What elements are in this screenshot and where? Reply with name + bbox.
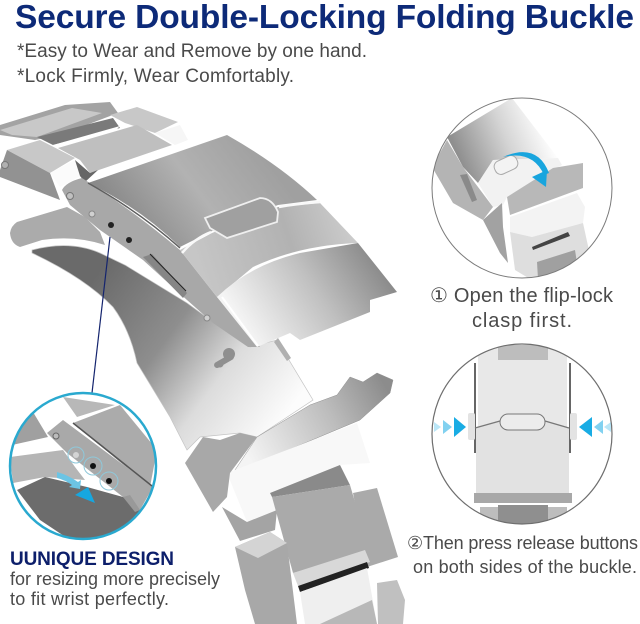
lower clasp left bracket [185,433,257,512]
lower band links [222,465,405,624]
top cover plate [88,135,317,247]
upper band links [0,102,188,200]
ridged flip-lock tab [205,198,278,238]
icon: press arrows [434,417,611,437]
seam highlights [88,183,320,346]
detail inset circle [10,393,157,540]
icon: resize arrow [57,472,81,489]
rail holes [66,192,210,321]
step 1 caption: ① Open the flip-lock [430,285,614,307]
side rail [62,178,260,347]
feature bullet text [17,41,367,87]
step 2 caption: on both sides of the buckle. [413,557,637,577]
lower clasp arm [10,207,105,247]
title: Secure Double-Locking Folding Buckle [15,0,634,36]
step 2 circle [432,344,612,525]
unique design description: to fit wrist perfectly. [10,589,169,609]
step 1 caption [430,285,614,332]
unique design description: for resizing more precisely [10,569,220,589]
release tab [475,414,569,430]
main illustration: watch band and open buckle [0,102,405,624]
pointer line to detail inset [92,237,110,393]
middle cover plate [180,203,358,297]
step 1 caption: clasp first. [472,310,572,332]
lower clasp wing [233,373,393,473]
step 2 caption: ②Then press release buttons [407,533,638,553]
lower clasp white body [227,423,370,522]
inner clasp surface [32,246,313,450]
feature bullet text: *Easy to Wear and Remove by one hand. [17,41,367,62]
feature bullet text: *Lock Firmly, Wear Comfortably. [17,66,294,87]
clasp pin [213,338,291,369]
unique design description [10,569,220,609]
step 2 caption [407,533,638,577]
unique design heading: UUNIQUE DESIGN [10,549,174,570]
icon: blue flip arrow [503,152,549,187]
lower cover plate [217,243,397,347]
step 1 circle [432,98,612,285]
